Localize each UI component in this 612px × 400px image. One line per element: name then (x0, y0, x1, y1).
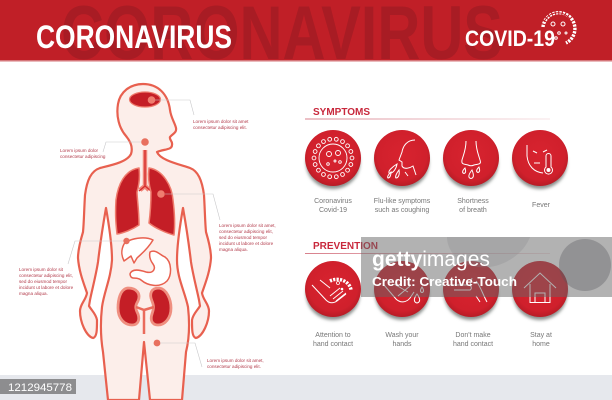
prevention: stay home: Stay at (530, 332, 552, 339)
caption: liver: Lorem ipsum dolor sit (19, 267, 64, 272)
caption: liver: incidunt ut labore et dolore (19, 285, 74, 290)
kidneys (118, 288, 171, 325)
caption: liver: sed do eiusmod tempor (19, 279, 67, 284)
trachea core (139, 150, 151, 191)
icon: brain (130, 92, 160, 107)
caption: lungs: sed do eiusmod tempor (219, 235, 267, 240)
title: CORONAVIRUS (36, 19, 232, 55)
stomach (130, 251, 171, 285)
covid-19 badge (465, 13, 575, 51)
heading: prevention: PREVENTION (313, 240, 378, 252)
caption: throat: consectetur adipiscing (60, 154, 106, 159)
symptom: coronavirus: Coronavirus (314, 198, 352, 205)
caption: liver: consectetur adipiscing elit, (19, 273, 73, 278)
prevention: wash hands: Wash your (385, 332, 419, 339)
body figure (78, 84, 211, 400)
prevention: no hand contact (443, 261, 499, 348)
ureters and bladder (136, 307, 154, 334)
caption: brain: Lorem ipsum dolor sit amet (193, 119, 249, 124)
liver marker (123, 238, 130, 244)
leader lines (68, 100, 220, 367)
prevention: no hand contact: Don't make (455, 332, 491, 339)
symptom: coronavirus (305, 130, 361, 214)
watermark band: Credit: Creative-Touch (372, 275, 517, 289)
caption: lower body: Lorem ipsum dolor sit amet, (207, 358, 264, 363)
liver (122, 238, 153, 263)
caption: brain: consectetur adipiscing elit. (193, 125, 247, 130)
lower body marker (154, 340, 160, 346)
caption: lower body: consectetur adipiscing elit. (207, 364, 261, 369)
prevention: wash hands: hands (392, 341, 412, 348)
image id tag: 1212945778 (8, 382, 72, 394)
symptom: coughing (374, 130, 431, 214)
prevention: stay home: home (532, 341, 550, 348)
lung marker (157, 190, 165, 198)
prevention: hand contact: Attention to (315, 332, 351, 339)
caption: throat: Lorem ipsum dolor (60, 148, 99, 153)
watermark band (361, 237, 612, 297)
symptom: shortness of breath: Shortness (457, 198, 489, 205)
caption: lungs: magna aliqua. (219, 247, 248, 252)
trachea (140, 150, 149, 190)
symptom: fever: Fever (532, 202, 551, 209)
caption: lungs: consectetur adipiscing elit, (219, 229, 273, 234)
lungs (116, 168, 175, 235)
symptom: fever (512, 130, 568, 209)
watermark band: gettyimages (372, 248, 490, 271)
prevention: stay home (512, 261, 568, 348)
symptom: shortness of breath: of breath (459, 207, 487, 214)
caption: liver: magna aliqua. (19, 291, 48, 296)
icon: header virus (543, 13, 575, 43)
covid-19 badge: COVID-19 (465, 26, 555, 51)
image id tag (0, 379, 76, 394)
footer band (0, 375, 612, 400)
heading: symptoms: SYMPTOMS (313, 106, 370, 118)
symptom: shortness of breath (443, 130, 499, 214)
prevention: hand contact: hand contact (313, 341, 353, 348)
prevention: no hand contact: hand contact (453, 341, 493, 348)
prevention: wash hands (374, 261, 430, 348)
symptom: coughing: such as coughing (375, 207, 429, 214)
icon: throat marker (141, 138, 149, 146)
caption: lungs: incidunt ut labore et dolore (219, 241, 274, 246)
caption: lungs: Lorem ipsum dolor sit amet, (219, 223, 276, 228)
prevention: hand contact (305, 261, 361, 348)
symptom: coronavirus: Covid-19 (319, 207, 347, 214)
header banner (0, 0, 612, 76)
symptom: coughing: Flu-like symptoms (374, 198, 431, 205)
